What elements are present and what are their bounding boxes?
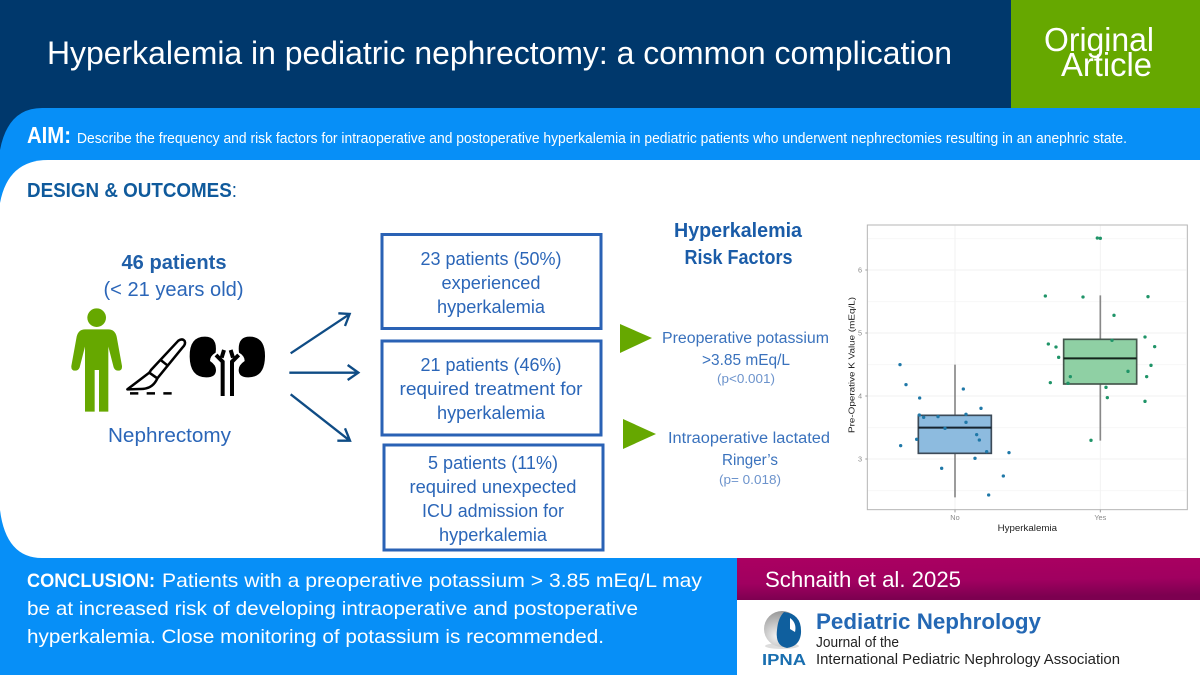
journal subtitle: International Pediatric Nephrology Association: [816, 651, 1120, 668]
badge: original article: Article: [1061, 46, 1152, 83]
icon: scalpel: [127, 339, 185, 393]
axis labels: 5: [858, 328, 862, 337]
journal subtitle: [816, 634, 1120, 668]
axis labels: No: [950, 513, 960, 522]
patient count: [104, 252, 244, 301]
box: 23 patients: [382, 234, 601, 328]
heading: risk factors: [674, 220, 803, 269]
box: no hyperkalemia: [918, 365, 991, 497]
box: 5 patients: 5 patients (11%): [428, 453, 558, 473]
conclusion text: [27, 570, 702, 648]
icon: ipna logo: IPNA: [762, 652, 806, 669]
conclusion text: hyperkalemia. Close monitoring of potassium is recommended.: [27, 626, 604, 648]
label: nephrectomy: Nephrectomy: [108, 425, 231, 447]
icon: triangle one: [620, 324, 652, 353]
patient count: 46 patients: [122, 252, 226, 274]
icon: person: [71, 308, 122, 412]
box: 5 patients: required unexpected: [410, 477, 576, 497]
box: 5 patients: [384, 445, 603, 550]
box: 21 patients: hyperkalemia: [437, 403, 546, 423]
risk factor: preoperative potassium: >3.85 mEq/L: [702, 352, 790, 369]
panel: design and outcomes: [0, 160, 1200, 558]
heading: risk factors: Risk Factors: [684, 247, 792, 269]
risk factor: preoperative potassium: (p<0.001): [717, 371, 775, 386]
icon: ipna logo: [762, 611, 806, 669]
data points: yes: [1044, 236, 1156, 442]
heading: design and outcomes: DESIGN & OUTCOMES:: [27, 180, 237, 202]
patient count: (< 21 years old): [104, 279, 244, 301]
heading: risk factors: Hyperkalemia: [674, 220, 803, 242]
conclusion text: CONCLUSION:: [27, 570, 155, 592]
conclusion text: be at increased risk of developing intraoperative and postoperative: [27, 598, 638, 620]
risk factor: lactated ringer's: [668, 430, 830, 487]
panel: journal: [737, 600, 1200, 675]
header band: [0, 0, 1200, 170]
risk factor: lactated ringer's: Intraoperative lactated: [668, 430, 830, 447]
box: 23 patients: experienced: [442, 273, 540, 293]
axis labels: 4: [858, 391, 862, 400]
axis labels: Pre-Operative K Value (mEq/L): [847, 297, 857, 433]
box: 5 patients: ICU admission for: [422, 501, 564, 521]
journal name: Pediatric Nephrology: [816, 609, 1042, 634]
box: 21 patients: 21 patients (46%): [420, 355, 562, 375]
axis labels: 3: [858, 454, 862, 463]
risk factor: lactated ringer's: (p= 0.018): [719, 472, 781, 487]
chart: boxplot of preoperative potassium: [847, 225, 1187, 533]
box: 23 patients: hyperkalemia: [437, 297, 546, 317]
citation bar: [737, 558, 1200, 600]
risk factor: preoperative potassium: Preoperative potassium: [662, 330, 829, 347]
journal subtitle: Journal of the: [816, 634, 899, 651]
box: yes hyperkalemia: [1064, 295, 1137, 441]
box: 5 patients: hyperkalemia: [439, 525, 548, 545]
conclusion text: Patients with a preoperative potassium > 3.85 mEq/L may: [162, 570, 702, 592]
badge: original article: [1011, 0, 1200, 108]
axis labels: Yes: [1094, 513, 1107, 522]
badge: original article: Original: [1044, 21, 1154, 58]
icon: triangle two: [623, 419, 656, 449]
arrows: three outcomes: [289, 313, 358, 441]
box: 23 patients: 23 patients (50%): [420, 249, 562, 269]
box: 21 patients: [382, 341, 601, 435]
title: Hyperkalemia in pediatric nephrectomy: a common complication: [47, 35, 952, 71]
citation bar: Schnaith et al. 2025: [765, 567, 961, 592]
aim text: AIM:: [27, 122, 71, 148]
icon: kidneys: [190, 337, 265, 396]
box: 21 patients: required treatment for: [400, 379, 582, 399]
risk factor: lactated ringer's: Ringer’s: [722, 452, 778, 469]
data points: no: [898, 363, 1011, 497]
axis labels: 6: [858, 265, 862, 274]
axis labels: [847, 265, 1107, 533]
aim text: Describe the frequency and risk factors for intraoperative and postoperative hyperkalemia in pediatric patients who underwent nephrectomies resulting in an anephric state.: [77, 131, 1127, 147]
axis labels: Hyperkalemia: [998, 523, 1058, 533]
risk factor: preoperative potassium: [662, 330, 829, 386]
aim text: [27, 122, 1127, 148]
